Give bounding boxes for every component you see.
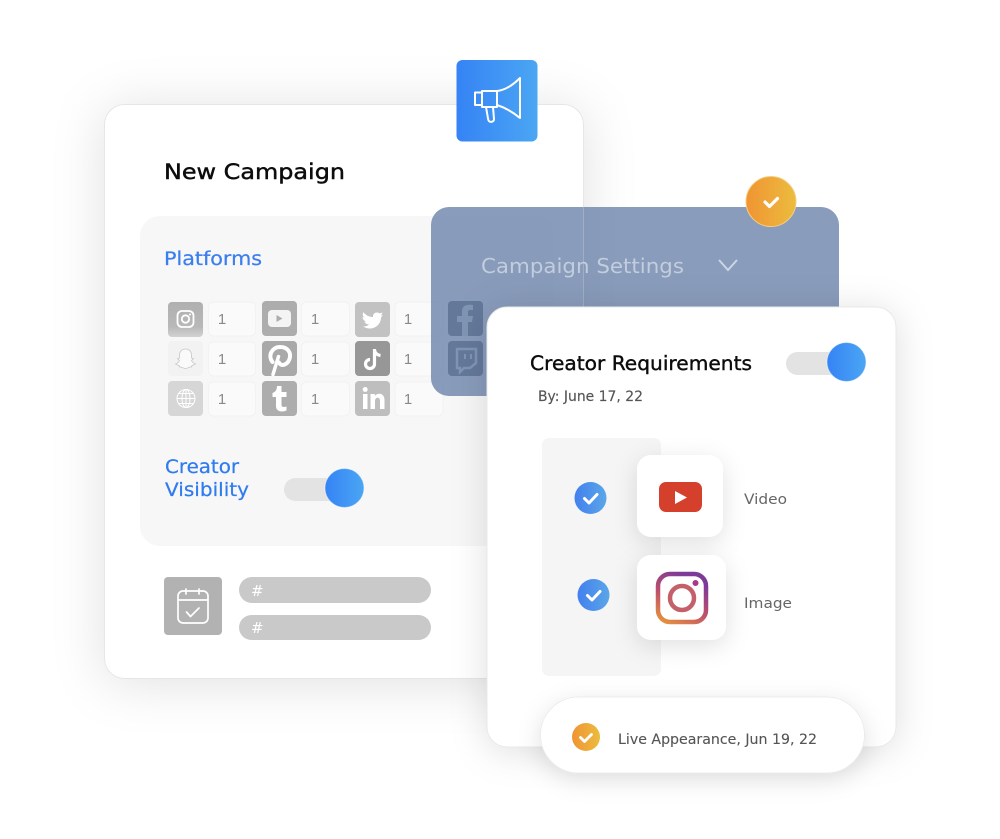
icon: twitch xyxy=(448,341,483,376)
tile: instagram xyxy=(637,555,726,640)
platform counts: 1 xyxy=(218,391,226,408)
tile: youtube xyxy=(637,455,723,537)
heading: creator visibility xyxy=(165,456,249,501)
icon: orange check xyxy=(572,723,600,751)
hashtag field two: # xyxy=(251,619,264,637)
text: campaign settings: Campaign Settings xyxy=(481,254,684,278)
platform counts: 1 xyxy=(218,351,226,368)
icon: youtube xyxy=(262,301,297,336)
icon: chevron xyxy=(719,260,737,270)
panel: new campaign card xyxy=(104,104,584,678)
icon: megaphone xyxy=(456,60,538,142)
panel: campaign settings xyxy=(431,207,839,396)
platform counts xyxy=(218,311,412,408)
check: video xyxy=(574,482,606,514)
icon: snapchat xyxy=(168,341,203,376)
platform counts: 1 xyxy=(404,391,412,408)
text: live appearance date: Live Appearance, Jun 19, 22 xyxy=(618,732,817,748)
badge: orange check xyxy=(746,176,796,226)
platform counts: 1 xyxy=(311,351,319,368)
heading: creator requirements: Creator Requirements xyxy=(530,352,752,375)
heading: new campaign: New Campaign xyxy=(164,160,345,185)
icon: globe xyxy=(168,381,203,416)
icon: tumblr xyxy=(262,381,297,416)
checklist background xyxy=(542,438,661,676)
label: video: Video xyxy=(744,492,787,508)
icon: twitter xyxy=(355,302,390,337)
platform counts: 1 xyxy=(404,311,412,328)
pill: live appearance xyxy=(540,697,864,773)
icon: facebook xyxy=(448,301,483,336)
hashtag field one xyxy=(239,577,431,603)
heading: creator visibility: Visibility xyxy=(165,479,249,501)
icon: calendar xyxy=(164,577,222,635)
platform counts: 1 xyxy=(218,311,226,328)
text: deadline: By: June 17, 22 xyxy=(538,389,643,405)
platform counts: 1 xyxy=(404,351,412,368)
hashtag field one: # xyxy=(251,582,264,600)
heading: platforms: Platforms xyxy=(164,249,262,270)
toggle: requirements xyxy=(786,342,866,382)
toggle: creator visibility xyxy=(284,468,364,508)
icon: instagram xyxy=(168,302,203,337)
icon: linkedin xyxy=(355,381,390,416)
platform counts: 1 xyxy=(311,391,319,408)
label: image: Image xyxy=(744,596,792,612)
hashtag field two xyxy=(239,615,431,640)
heading: creator visibility: Creator xyxy=(165,456,239,478)
icon: tiktok xyxy=(355,341,390,376)
panel: platforms xyxy=(140,216,554,546)
icon: pinterest xyxy=(262,341,297,376)
platform count boxes xyxy=(208,302,443,416)
panel: creator requirements xyxy=(487,307,896,747)
check: image xyxy=(578,579,610,611)
platform counts: 1 xyxy=(311,311,319,328)
